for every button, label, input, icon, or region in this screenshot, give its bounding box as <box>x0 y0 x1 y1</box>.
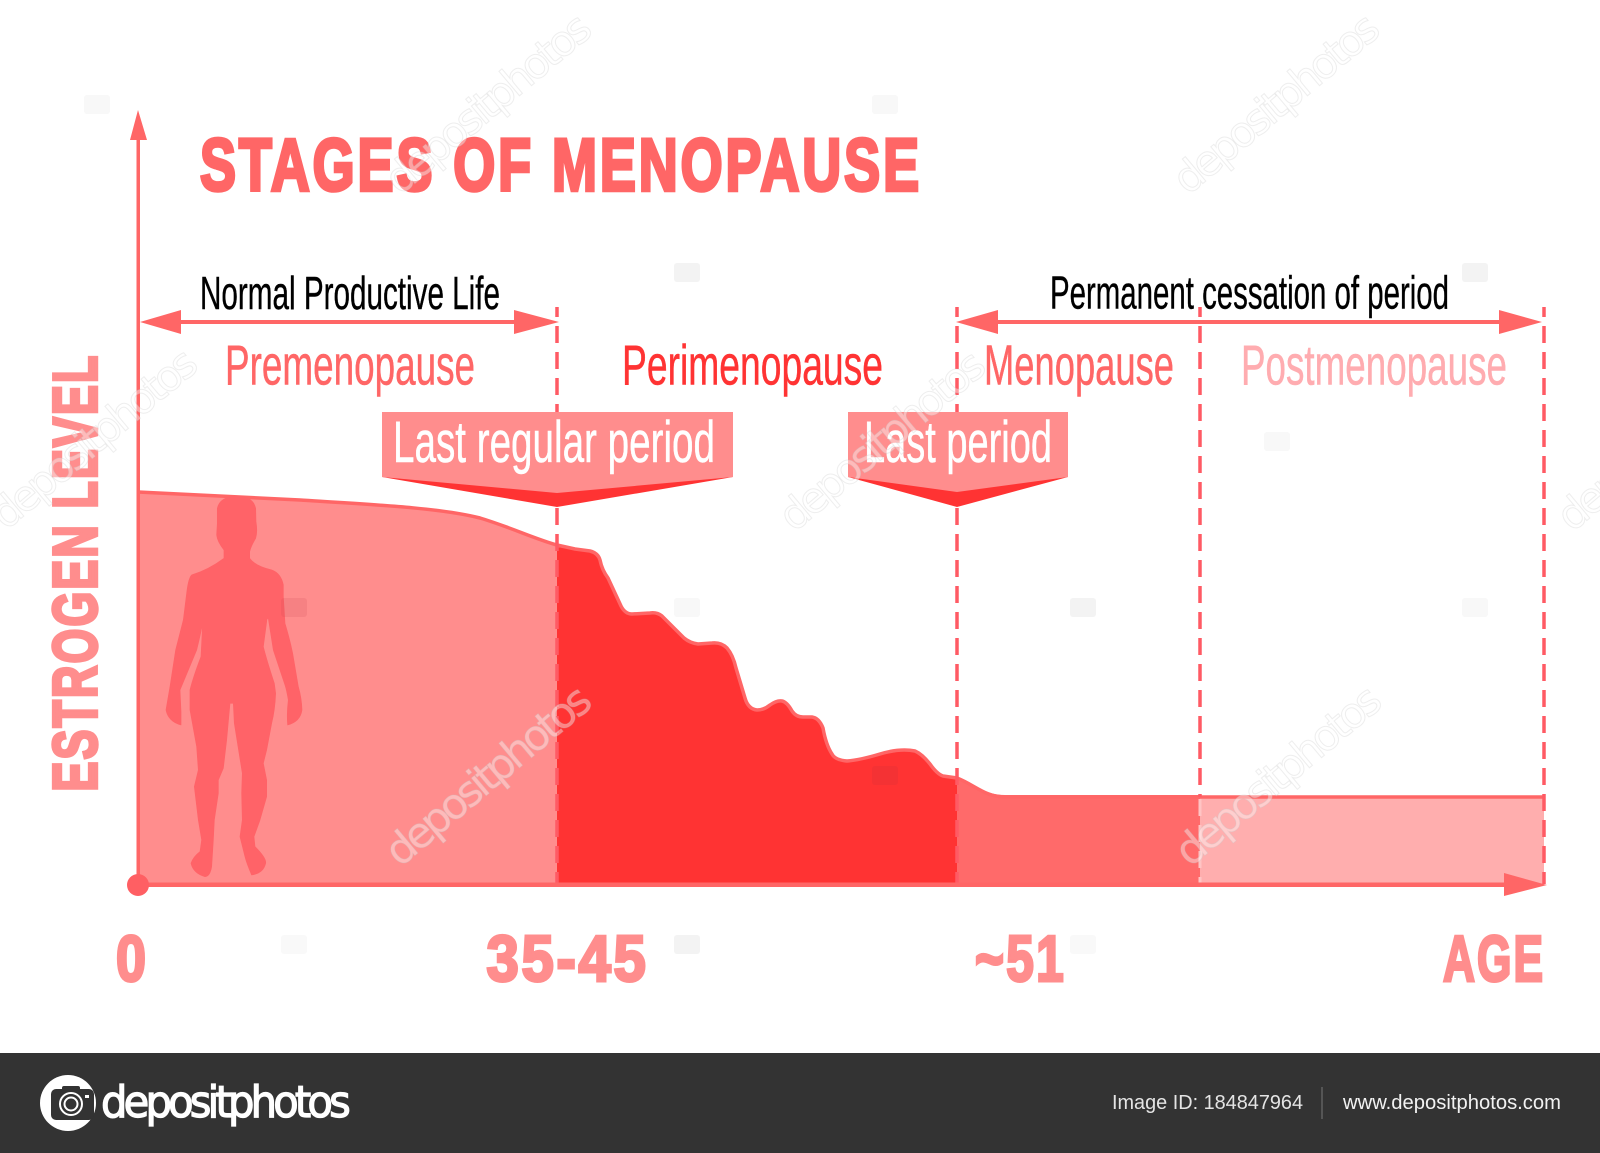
y axis arrow <box>130 110 147 885</box>
watermark overlay: depositphotos <box>1165 676 1390 876</box>
double arrow <box>956 310 1542 334</box>
axes <box>127 110 1547 896</box>
boundary: last regular period <box>555 307 559 884</box>
icon: camera logo <box>40 1075 96 1131</box>
boundary: end of axis <box>1542 307 1546 884</box>
boundary: menopause to postmenopause <box>1198 307 1202 797</box>
callout banner <box>382 412 733 493</box>
callout tip <box>382 477 733 507</box>
x axis arrow <box>138 873 1547 896</box>
callout: last period <box>848 410 1068 507</box>
watermark overlay: depositphotos <box>769 341 994 541</box>
axis tick: 35-45: 35-45 <box>486 922 648 995</box>
span: permanent cessation of period <box>956 266 1542 334</box>
label: Normal Productive Life <box>200 267 500 319</box>
watermark overlay: depositphotos <box>1163 4 1388 204</box>
y axis title: estrogen level: ESTROGEN LEVEL <box>42 354 110 792</box>
boundary: last period <box>955 307 959 884</box>
callout banner <box>848 412 1068 492</box>
callout: last regular period <box>382 410 733 507</box>
icon: female body silhouette <box>166 496 302 877</box>
footer background <box>0 1053 1600 1153</box>
area: postmenopause <box>1200 797 1544 884</box>
axis tick: 0: 0 <box>116 922 146 995</box>
axis label: age: AGE <box>1443 922 1545 995</box>
logo wordmark: depositphotos <box>101 1077 349 1128</box>
footer divider <box>1322 1087 1323 1119</box>
axis tick: about 51: ~51 <box>975 922 1066 995</box>
area: menopause <box>957 778 1200 885</box>
watermark overlay: depositphotos <box>375 4 600 204</box>
stage label: premenopause: Premenopause <box>225 334 475 398</box>
axis origin dot <box>127 874 149 896</box>
stage label: menopause: Menopause <box>984 334 1174 398</box>
stage label: perimenopause: Perimenopause <box>622 334 883 398</box>
span: normal productive life <box>140 267 559 334</box>
title: STAGES OF MENOPAUSE <box>200 124 922 206</box>
website url: www.depositphotos.com <box>1342 1092 1561 1114</box>
image id: Image ID: 184847964 <box>1112 1092 1303 1114</box>
dashed divider inside chart: menopause to postmenopause <box>1198 799 1202 884</box>
area chart: estrogen level by stage <box>138 492 1544 885</box>
footer bar <box>0 1053 1600 1153</box>
area: perimenopause <box>557 547 957 885</box>
callout text: Last regular period <box>393 410 715 475</box>
area: premenopause <box>138 492 557 885</box>
double arrow <box>140 310 559 334</box>
dashed stage boundaries <box>557 307 1544 884</box>
callout tip <box>848 477 1068 507</box>
estrogen curve outline <box>138 492 1544 797</box>
watermark overlay: depositphotos <box>375 676 600 876</box>
callout text: Last period <box>864 410 1052 475</box>
